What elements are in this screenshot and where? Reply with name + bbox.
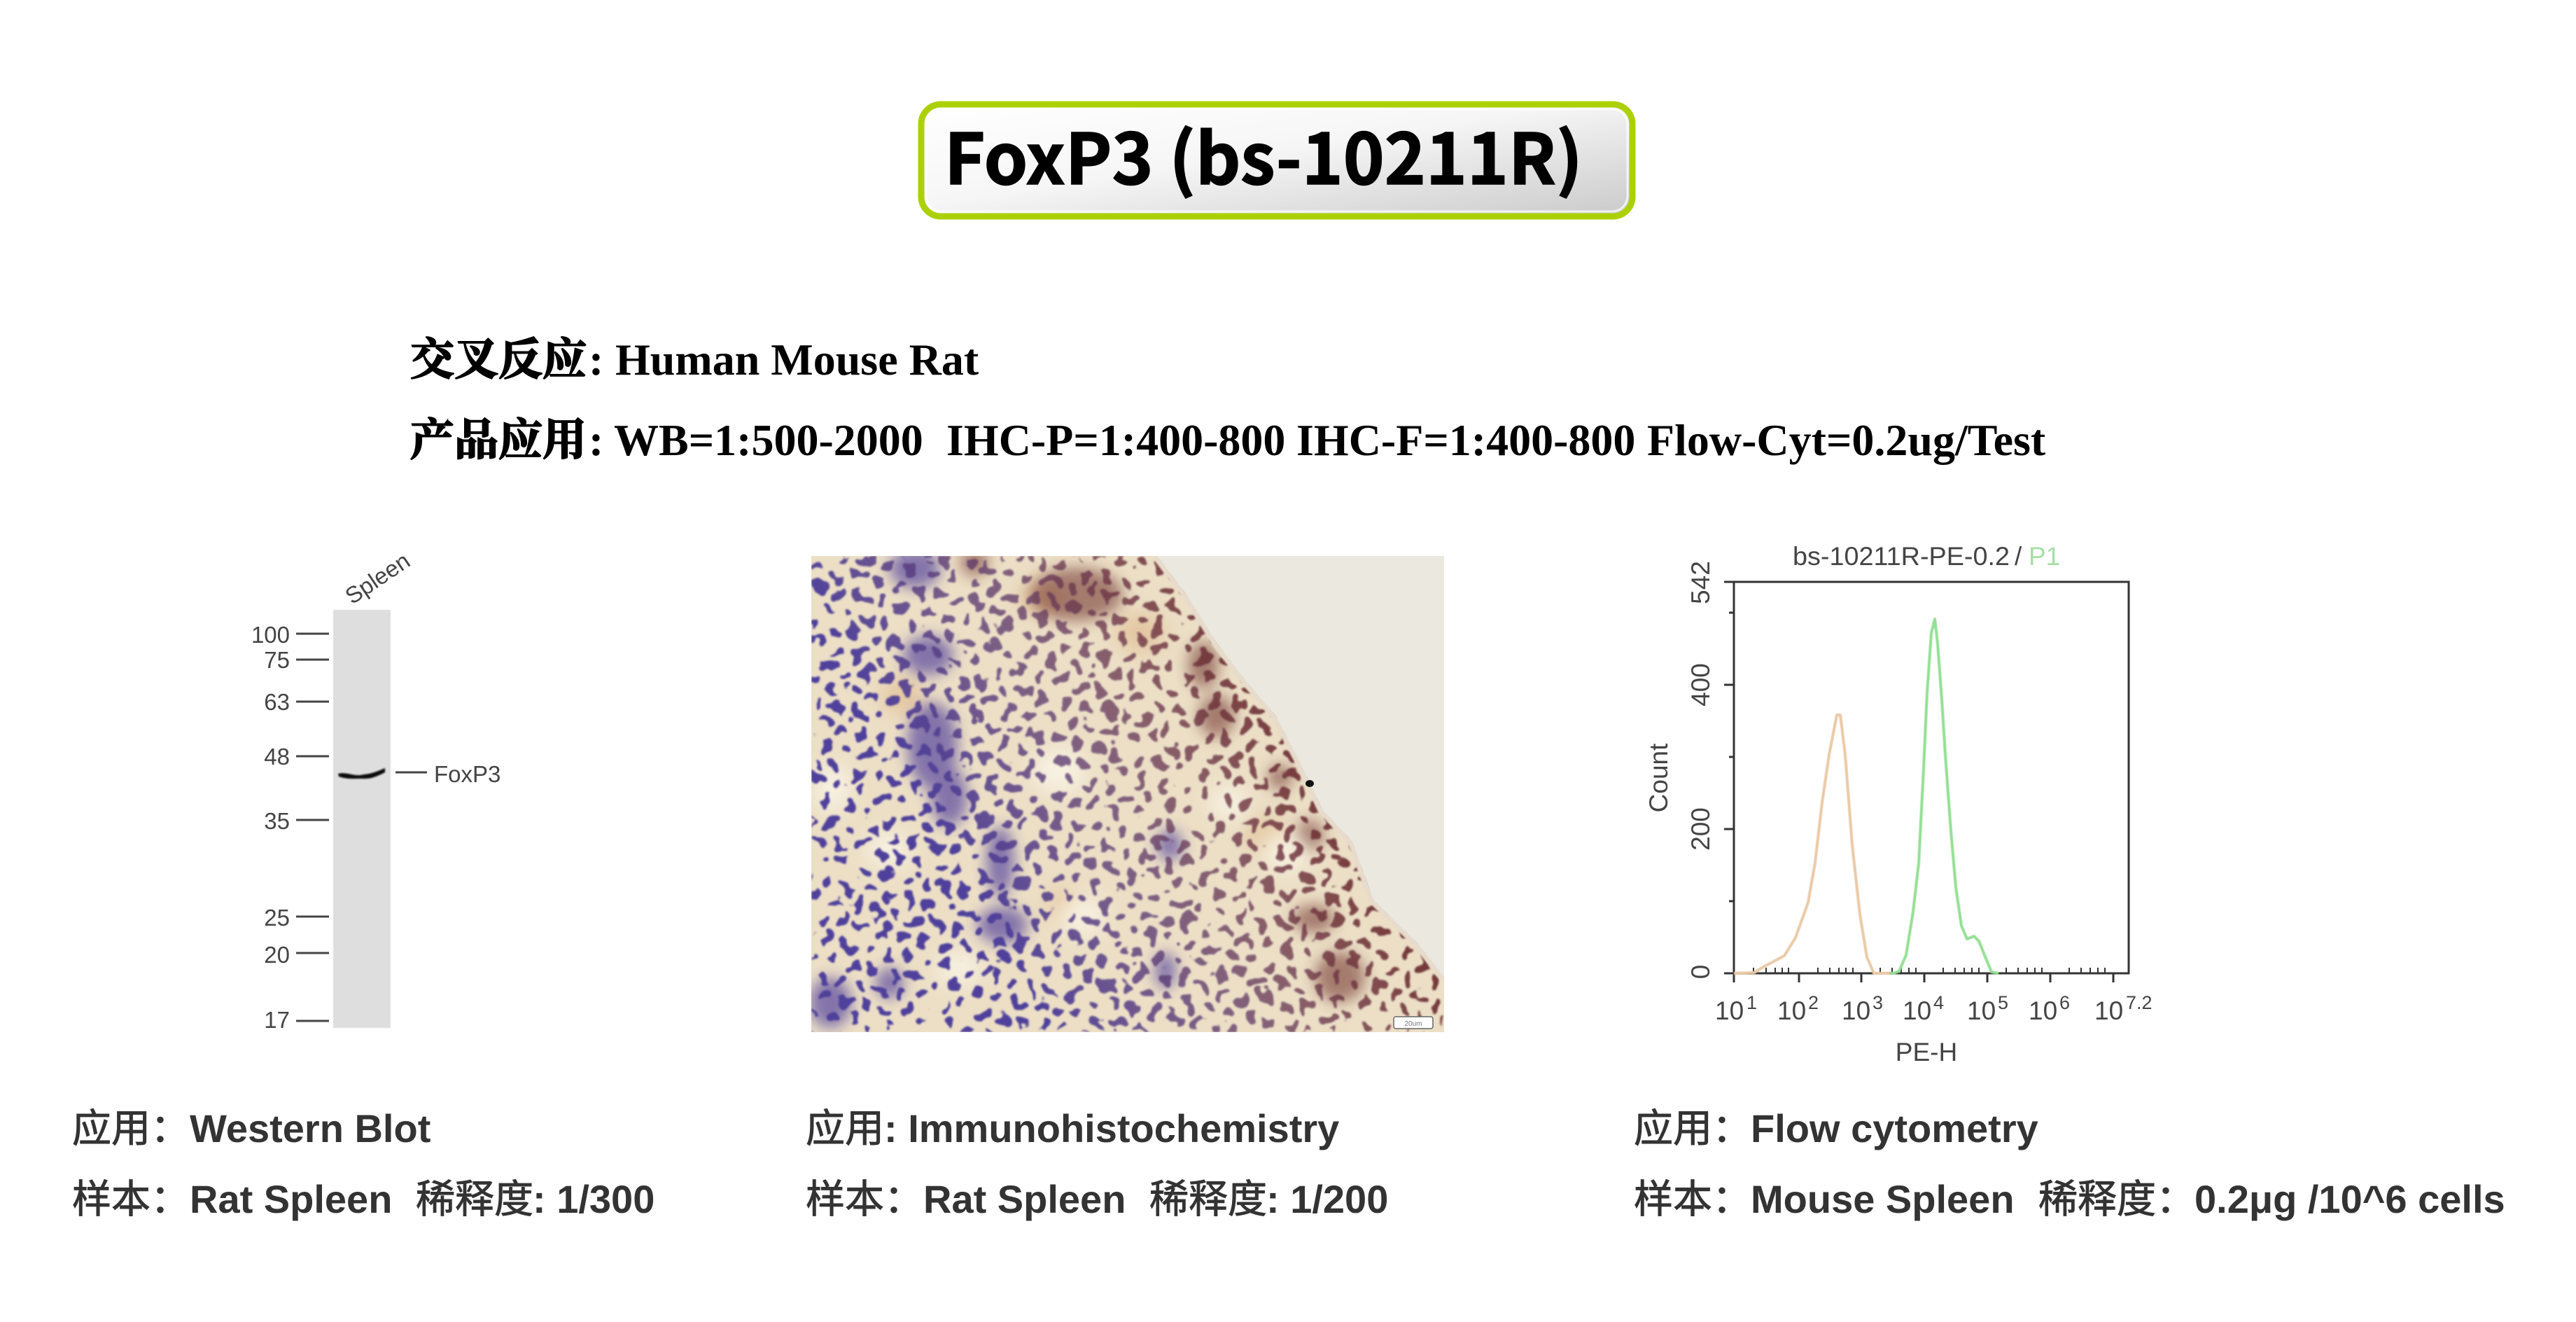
x axis numbers: 10 bbox=[1842, 996, 1870, 1025]
product info: cross reactivity bbox=[410, 324, 979, 388]
caption: flow cytometry: Mouse Spleen bbox=[1751, 1177, 2015, 1221]
scale bar bbox=[1394, 1017, 1433, 1029]
x axis numbers: 5 bbox=[1998, 992, 2008, 1013]
caption: flow cytometry bbox=[1634, 1097, 2505, 1225]
panel: western blot bbox=[251, 548, 500, 1033]
debris dot bbox=[1306, 780, 1314, 787]
marker labels: 20 bbox=[264, 942, 290, 968]
caption: immunohistochemistry: 样本： bbox=[806, 1168, 923, 1225]
y axis numbers bbox=[1686, 561, 1715, 979]
slide background bbox=[811, 556, 1444, 1032]
product info: applications: 产品应用 bbox=[410, 405, 587, 468]
x axis numbers: 10 bbox=[1903, 996, 1931, 1025]
caption: immunohistochemistry: : Immunohistochemistry bbox=[884, 1106, 1339, 1150]
y axis numbers: 400 bbox=[1686, 663, 1715, 707]
x axis numbers: 10 bbox=[1715, 996, 1744, 1025]
caption: flow cytometry: 应用： bbox=[1634, 1097, 1751, 1154]
caption: western blot: Western Blot bbox=[190, 1106, 430, 1150]
x axis numbers: 10 bbox=[1777, 996, 1806, 1025]
band label: FoxP3 bbox=[434, 761, 500, 787]
marker labels: 17 bbox=[264, 1007, 290, 1033]
caption: immunohistochemistry bbox=[806, 1097, 1388, 1225]
plot title: bs-10211R-PE-0.2 bbox=[1793, 542, 2010, 571]
caption: flow cytometry: 稀释度： bbox=[2038, 1168, 2195, 1225]
marker ticks bbox=[296, 634, 427, 1021]
x axis numbers: 10 bbox=[1967, 996, 1996, 1025]
pale stroma patches bbox=[814, 749, 1308, 986]
y axis numbers: 200 bbox=[1686, 807, 1715, 851]
isotype control curve bbox=[1734, 715, 1890, 973]
pale tissue edge bbox=[1157, 556, 1444, 977]
marker labels bbox=[251, 622, 290, 1033]
caption: flow cytometry: Flow cytometry bbox=[1751, 1106, 2038, 1150]
caption: flow cytometry: 样本： bbox=[1634, 1168, 1751, 1225]
tissue section bbox=[809, 548, 1444, 1032]
caption: flow cytometry: 0.2μg /10^6 cells bbox=[2194, 1177, 2505, 1221]
product info: applications: WB=1:500-2000 bbox=[614, 415, 923, 465]
caption: immunohistochemistry: : 1/200 bbox=[1266, 1177, 1388, 1221]
x axis title: PE-H bbox=[1896, 1038, 1957, 1066]
marker labels: 48 bbox=[264, 744, 290, 770]
marker labels: 25 bbox=[264, 905, 290, 931]
x axis numbers: 2 bbox=[1808, 992, 1819, 1013]
caption: western blot: Rat Spleen bbox=[190, 1177, 392, 1221]
caption: western blot: 样本： bbox=[72, 1168, 190, 1225]
y axis numbers: 0 bbox=[1686, 965, 1715, 979]
title badge bbox=[921, 103, 1632, 216]
x axis numbers: 4 bbox=[1933, 992, 1944, 1013]
x axis numbers: 10 bbox=[2029, 996, 2057, 1025]
caption: immunohistochemistry: 稀释度 bbox=[1149, 1168, 1267, 1225]
product info: cross reactivity: : bbox=[589, 335, 603, 384]
product info: cross reactivity: 交叉反应 bbox=[410, 324, 587, 388]
DAB positive nuclei bbox=[811, 556, 1444, 1032]
marker labels: 75 bbox=[264, 647, 290, 673]
caption: immunohistochemistry: 应用 bbox=[806, 1097, 884, 1154]
product info: applications: Flow-Cyt=0.2ug/Test bbox=[1647, 415, 2046, 465]
x axis numbers: 6 bbox=[2059, 992, 2070, 1013]
product info: applications bbox=[410, 405, 2046, 468]
x axis numbers: 1 bbox=[1746, 992, 1757, 1013]
lane label: Spleen bbox=[340, 548, 414, 609]
blot lane bbox=[333, 610, 391, 1028]
dense positive clusters bbox=[960, 548, 1365, 1002]
product info: applications: IHC-F=1:400-800 bbox=[1296, 415, 1635, 465]
x axis numbers: 7.2 bbox=[2126, 992, 2152, 1013]
plot title: / bbox=[2015, 542, 2022, 571]
marker labels: 35 bbox=[264, 808, 290, 834]
x axis numbers: 10 bbox=[2094, 996, 2123, 1025]
marker labels: 100 bbox=[251, 622, 290, 648]
protein band bbox=[338, 768, 385, 779]
caption: western blot: 应用： bbox=[72, 1097, 190, 1154]
plot title: P1 bbox=[2029, 542, 2060, 571]
y axis title: Count bbox=[1644, 743, 1673, 812]
caption: immunohistochemistry: Rat Spleen bbox=[923, 1177, 1126, 1221]
caption: western blot: 稀释度 bbox=[416, 1168, 533, 1225]
marker labels: 63 bbox=[264, 689, 290, 715]
hematoxylin nuclei bbox=[811, 556, 1444, 1032]
y axis numbers: 542 bbox=[1686, 561, 1715, 604]
antibody stained curve bbox=[1890, 619, 1998, 973]
x axis numbers bbox=[1715, 992, 2152, 1025]
scale bar: 20um bbox=[1404, 1020, 1422, 1028]
title text: FoxP3 (bs-10211R) bbox=[944, 103, 1583, 204]
product info: applications: : bbox=[589, 415, 603, 465]
panel: immunohistochemistry micrograph bbox=[809, 548, 1444, 1032]
caption: western blot: : 1/300 bbox=[533, 1177, 654, 1221]
dense lymphocyte clusters bbox=[809, 549, 1182, 1028]
plot frame and ticks bbox=[1724, 582, 2129, 982]
panel: flow cytometry histogram bbox=[1644, 542, 2152, 1066]
caption: western blot bbox=[72, 1097, 654, 1225]
product info: cross reactivity: Human Mouse Rat bbox=[615, 335, 979, 384]
product info: applications: IHC-P=1:400-800 bbox=[946, 415, 1285, 465]
x axis numbers: 3 bbox=[1872, 992, 1883, 1013]
